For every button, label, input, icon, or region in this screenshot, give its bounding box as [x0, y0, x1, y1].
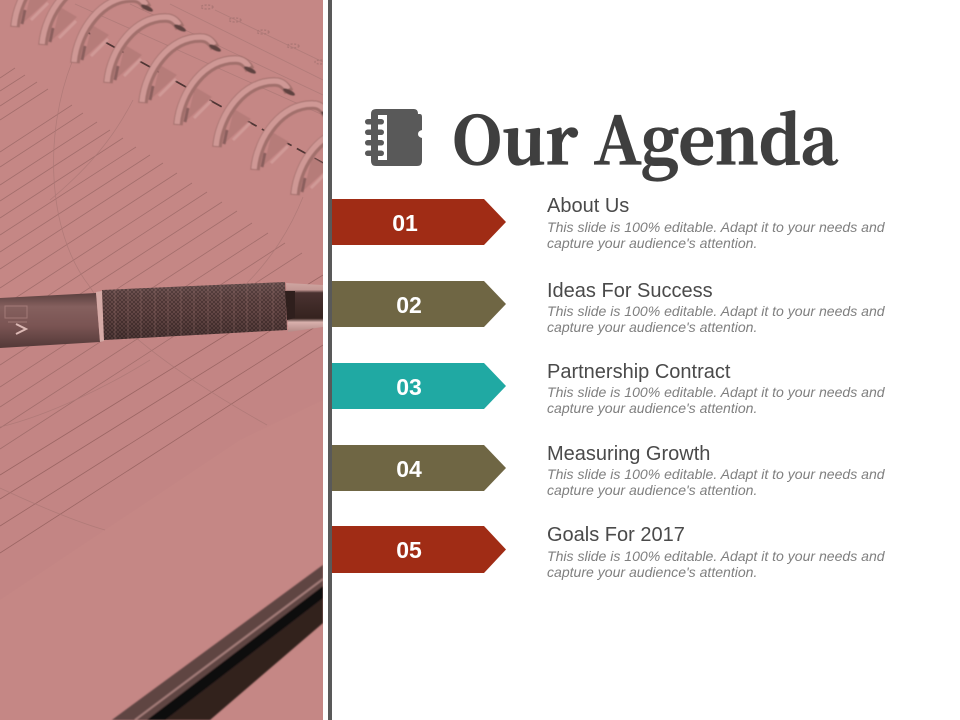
- description 02: This slide is 100% editable. Adapt it to your needs and: [547, 303, 886, 319]
- photo detail: binding strip lines: [75, 4, 323, 115]
- arrow 02: [332, 281, 506, 327]
- agenda item 05: [332, 524, 886, 580]
- agenda item 01: [332, 195, 886, 251]
- number 03: 03: [396, 374, 422, 400]
- heading: Ideas For Success: Ideas For Success: [547, 280, 713, 302]
- photo detail: faint arcs on page: [0, 62, 303, 530]
- arrow 01: [332, 199, 506, 245]
- photo detail: ruled page lines: [0, 68, 323, 553]
- agenda item 03: [332, 361, 886, 416]
- photo detail: faint page shadow: [0, 300, 323, 600]
- description 03: capture your audience's attention.: [547, 400, 757, 416]
- description 02: capture your audience's attention.: [547, 319, 757, 335]
- number 01: 01: [392, 210, 418, 236]
- agenda item 04: [332, 443, 886, 498]
- photo detail: page ornaments: [201, 5, 325, 64]
- photo: notebook and pen: [0, 0, 323, 720]
- description 04: This slide is 100% editable. Adapt it to your needs and: [547, 466, 886, 482]
- heading: Partnership Contract: Partnership Contract: [547, 361, 731, 383]
- photo detail: spiral binding rings: [10, 0, 323, 196]
- number 05: 05: [396, 537, 422, 563]
- number 02: 02: [396, 292, 422, 318]
- arrow 04: [332, 445, 506, 491]
- vertical divider bar: [328, 0, 332, 720]
- heading: About Us: About Us: [547, 195, 629, 217]
- description 05: capture your audience's attention.: [547, 564, 757, 580]
- photo detail: dark binder edge: [112, 565, 323, 720]
- icon: notebook: [365, 109, 422, 166]
- title: Our Agenda: [452, 89, 838, 183]
- heading: Goals For 2017: Goals For 2017: [547, 524, 685, 546]
- description 04: capture your audience's attention.: [547, 482, 757, 498]
- number 04: 04: [396, 456, 422, 482]
- description 01: capture your audience's attention.: [547, 235, 757, 251]
- description 05: This slide is 100% editable. Adapt it to your needs and: [547, 548, 886, 564]
- description 03: This slide is 100% editable. Adapt it to your needs and: [547, 384, 886, 400]
- arrow 03: [332, 363, 506, 409]
- heading: Measuring Growth: Measuring Growth: [547, 443, 710, 465]
- description 01: This slide is 100% editable. Adapt it to your needs and: [547, 219, 886, 235]
- photo detail: pen: [0, 282, 323, 348]
- agenda item 02: [332, 280, 886, 335]
- arrow 05: [332, 526, 506, 573]
